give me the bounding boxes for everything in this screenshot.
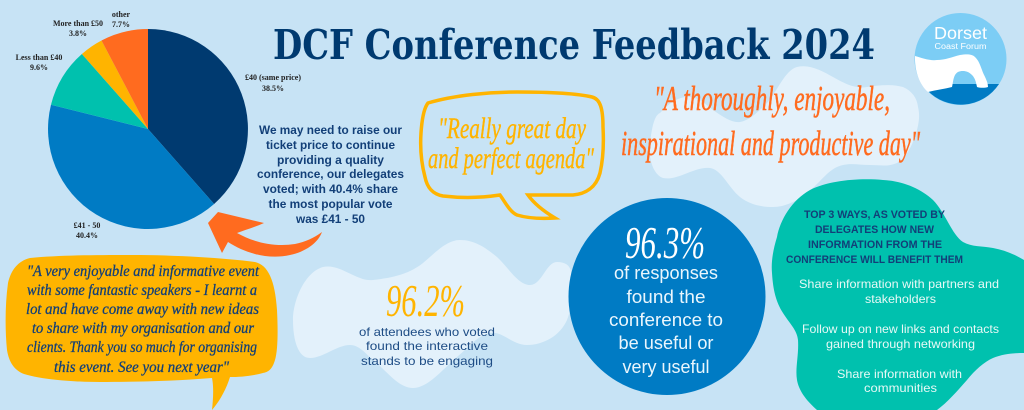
stat caption: conference to [609, 309, 723, 330]
testimonial text [26, 263, 259, 376]
ticket price explanation text: ticket price to continue [266, 138, 395, 152]
panel heading: CONFERENCE WILL BENEFIT THEM [786, 254, 963, 266]
ticket price explanation text: conference, our delegates [257, 167, 404, 181]
slice: more than £50 [82, 40, 148, 129]
testimonial text: clients. Thank you so much for organising [27, 339, 257, 356]
stat caption [359, 325, 495, 368]
pie label: other: 7.7% [112, 20, 130, 29]
pie chart [48, 29, 248, 229]
stat caption: be useful or [618, 332, 714, 353]
testimonial text: to share with my organisation and our [32, 320, 255, 337]
panel: top 3 ways teal blob [772, 179, 1024, 410]
pie label: other: other [112, 10, 131, 19]
stat caption: found the [626, 286, 706, 307]
pie label: £41 - 50: 40.4% [76, 231, 98, 240]
logo sea [925, 84, 999, 105]
pie label: more than £50: More than £50 [53, 19, 103, 28]
pie label: £41 - 50: £41 - 50 [74, 221, 100, 230]
panel list items: gained through networking [826, 337, 975, 351]
ticket price explanation text [257, 123, 404, 226]
panel heading: INFORMATION FROM THE [808, 239, 942, 251]
logo circle [914, 13, 1006, 105]
stat circle: 96.3% useful [568, 198, 766, 395]
logo cliff arch [915, 54, 988, 92]
yellow bubble shape [6, 255, 278, 410]
panel list items: Share information with partners and [799, 277, 999, 291]
testimonial text: with some fantastic speakers - I learnt a [27, 282, 257, 299]
testimonial text: this event. See you next year" [54, 359, 229, 376]
quote: really great day [428, 112, 594, 175]
speech bubble outline: really great day [421, 92, 603, 218]
panel heading [786, 209, 963, 266]
speech bubble: yellow testimonial [6, 255, 278, 410]
pie label: more than £50: 3.8% [69, 29, 87, 38]
logo text: Coast Forum: Coast Forum [934, 42, 987, 51]
slice: £40 same price [148, 29, 248, 204]
panel list items [799, 277, 999, 395]
panel list items: stakeholders [865, 292, 936, 306]
panel list items: Follow up on new links and contacts [802, 322, 999, 336]
pie label: less than £40: 9.6% [30, 63, 48, 72]
logo text: Dorset: Dorset [934, 23, 987, 43]
title: DCF Conference Feedback 2024 [273, 21, 875, 69]
quote: thoroughly enjoyable [621, 79, 920, 163]
ticket price explanation text: voted; with 40.4% share [263, 182, 398, 196]
slice: £41 - 50 [48, 105, 214, 229]
stat caption [609, 262, 723, 377]
slice: other [102, 29, 148, 129]
ticket price explanation text: the most popular vote [268, 197, 393, 211]
testimonial text: "A very enjoyable and informative event [27, 263, 259, 280]
stat number 96.2%: 96.2% [386, 275, 465, 326]
slice: less than £40 [51, 54, 148, 129]
panel heading: DELEGATES HOW NEW [815, 224, 935, 236]
stat caption: of attendees who voted [359, 325, 495, 339]
pale blob: bottom centre [293, 240, 572, 388]
quote: thoroughly enjoyable: "A thoroughly, enjoyable, [654, 79, 890, 118]
stat caption: very useful [622, 356, 710, 377]
pale blob: top right [650, 66, 919, 207]
stat caption: of responses [614, 262, 718, 283]
pie label: £40 same price: £40 (same price) [245, 73, 301, 82]
logo: Dorset Coast Forum [914, 13, 1006, 105]
ticket price explanation text: was £41 - 50 [295, 212, 365, 226]
stat number 96.3%: 96.3% [625, 217, 705, 268]
testimonial text: lot and have come away with new ideas [26, 301, 259, 318]
panel list items: Share information with [837, 367, 962, 381]
pie label: £40 same price: 38.5% [262, 84, 284, 93]
stat: 96.2% interactive stands [359, 275, 495, 368]
ticket price explanation text: We may need to raise our [259, 123, 402, 137]
ticket price explanation text: providing a quality [277, 153, 384, 167]
quote: really great day: "Really great day [438, 112, 586, 145]
panel heading: TOP 3 WAYS, AS VOTED BY [804, 209, 946, 221]
panel list items: communities [864, 381, 937, 395]
stat caption: stands to be engaging [361, 354, 493, 368]
pie label: less than £40: Less than £40 [16, 53, 62, 62]
quote: really great day: and perfect agenda" [428, 142, 594, 175]
arrow pointing to pie chart [208, 212, 322, 257]
blue circle [568, 198, 766, 395]
teal blob shape [772, 179, 1024, 410]
stat caption: found the interactive [366, 339, 488, 353]
